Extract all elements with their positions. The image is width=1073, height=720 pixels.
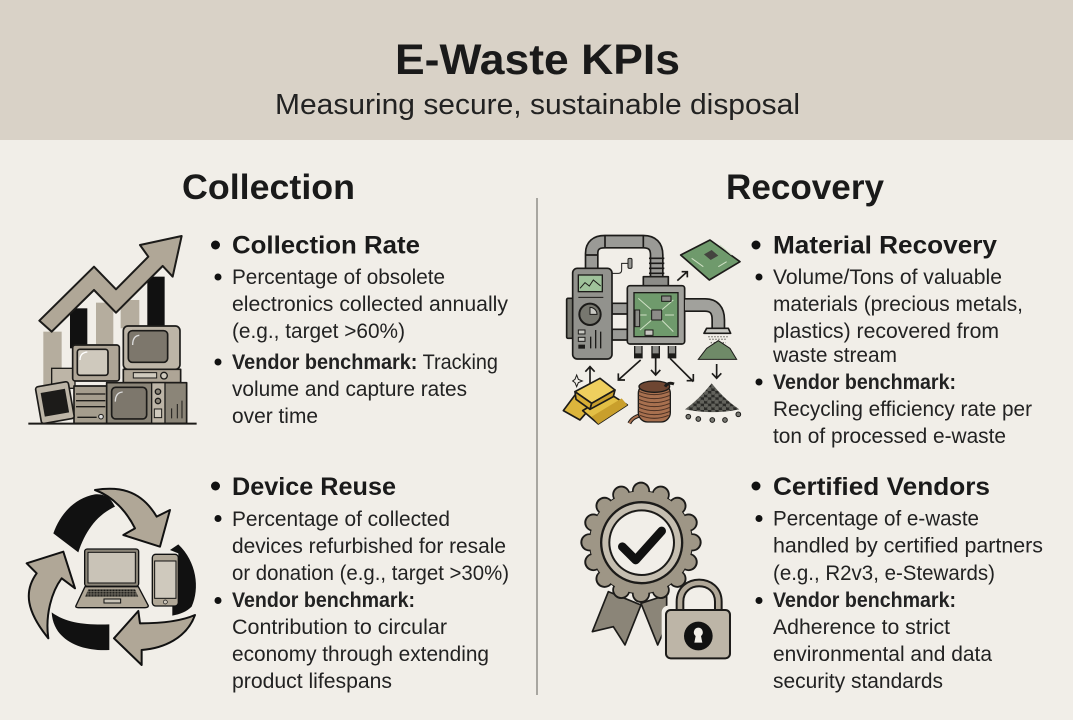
bullet text: certified vendors: (e.g., R2v3, e-Stewards) xyxy=(773,562,995,585)
bullet text: material recovery: Material Recovery xyxy=(773,232,997,260)
bullet text: material recovery: ton of processed e-waste xyxy=(773,425,1006,448)
bullet text: device reuse: Vendor benchmark: xyxy=(232,589,415,612)
bullet text: collection rate: Percentage of obsolete xyxy=(232,266,445,289)
header band xyxy=(0,0,1073,140)
title: E-Waste KPIs xyxy=(395,36,680,84)
bullet text: device reuse: product lifespans xyxy=(232,670,392,693)
bullet text: device reuse: Device Reuse xyxy=(232,473,396,501)
icon: certified badge and padlock xyxy=(580,482,734,662)
bullet text: device reuse: Contribution to circular xyxy=(232,616,447,639)
bullet text: device reuse xyxy=(211,473,509,693)
bullet text: collection rate: Collection Rate xyxy=(232,232,420,260)
bullet text: certified vendors: Certified Vendors xyxy=(773,473,990,501)
icon: material recovery machine xyxy=(563,235,741,424)
bullet text: device reuse: economy through extending xyxy=(232,643,489,666)
panel: recovery xyxy=(563,168,1043,693)
bullet text: certified vendors: Percentage of e-waste xyxy=(773,508,979,530)
bullet text: certified vendors: handled by certified partners xyxy=(773,534,1043,558)
bullet text: certified vendors: environmental and data xyxy=(773,643,992,666)
bullet text: material recovery: materials (precious metals, xyxy=(773,293,1023,316)
panel: collection xyxy=(27,168,509,693)
bullet text: device reuse: or donation (e.g., target >30%) xyxy=(232,562,509,585)
bullet text: certified vendors: Vendor benchmark: xyxy=(773,589,956,612)
bullet text: device reuse: devices refurbished for resale xyxy=(232,535,506,558)
bullet text: material recovery xyxy=(752,232,1032,448)
heading: recovery: Recovery xyxy=(726,168,885,207)
bullet text: material recovery: Vendor benchmark: xyxy=(773,371,956,394)
bullet text: material recovery: Volume/Tons of valuable xyxy=(773,266,1002,289)
bullet text: certified vendors: security standards xyxy=(773,670,943,693)
icon: recycling arrows around laptop and phone xyxy=(27,489,196,665)
bullet text: certified vendors xyxy=(752,473,1043,693)
bullet text: material recovery: Recycling efficiency rate per xyxy=(773,398,1032,421)
bullet text: material recovery: waste stream xyxy=(772,344,897,367)
bullet text: device reuse: Percentage of collected xyxy=(232,508,450,531)
bullet text: collection rate: Vendor benchmark: Tracking xyxy=(232,351,498,374)
heading: collection: Collection xyxy=(182,168,355,207)
bullet text: collection rate xyxy=(211,232,509,428)
bullet text: material recovery: plastics) recovered from xyxy=(773,320,999,343)
bullet text: collection rate: (e.g., target >60%) xyxy=(232,320,405,343)
subtitle: Measuring secure, sustainable disposal xyxy=(275,89,800,121)
bullet text: collection rate: over time xyxy=(232,405,318,428)
bullet text: certified vendors: Adherence to strict xyxy=(773,616,950,639)
bullet text: collection rate: electronics collected annually xyxy=(232,293,509,316)
icon: rising arrow over stacked old electronics xyxy=(28,236,197,424)
bullet text: collection rate: volume and capture rates xyxy=(232,378,467,401)
